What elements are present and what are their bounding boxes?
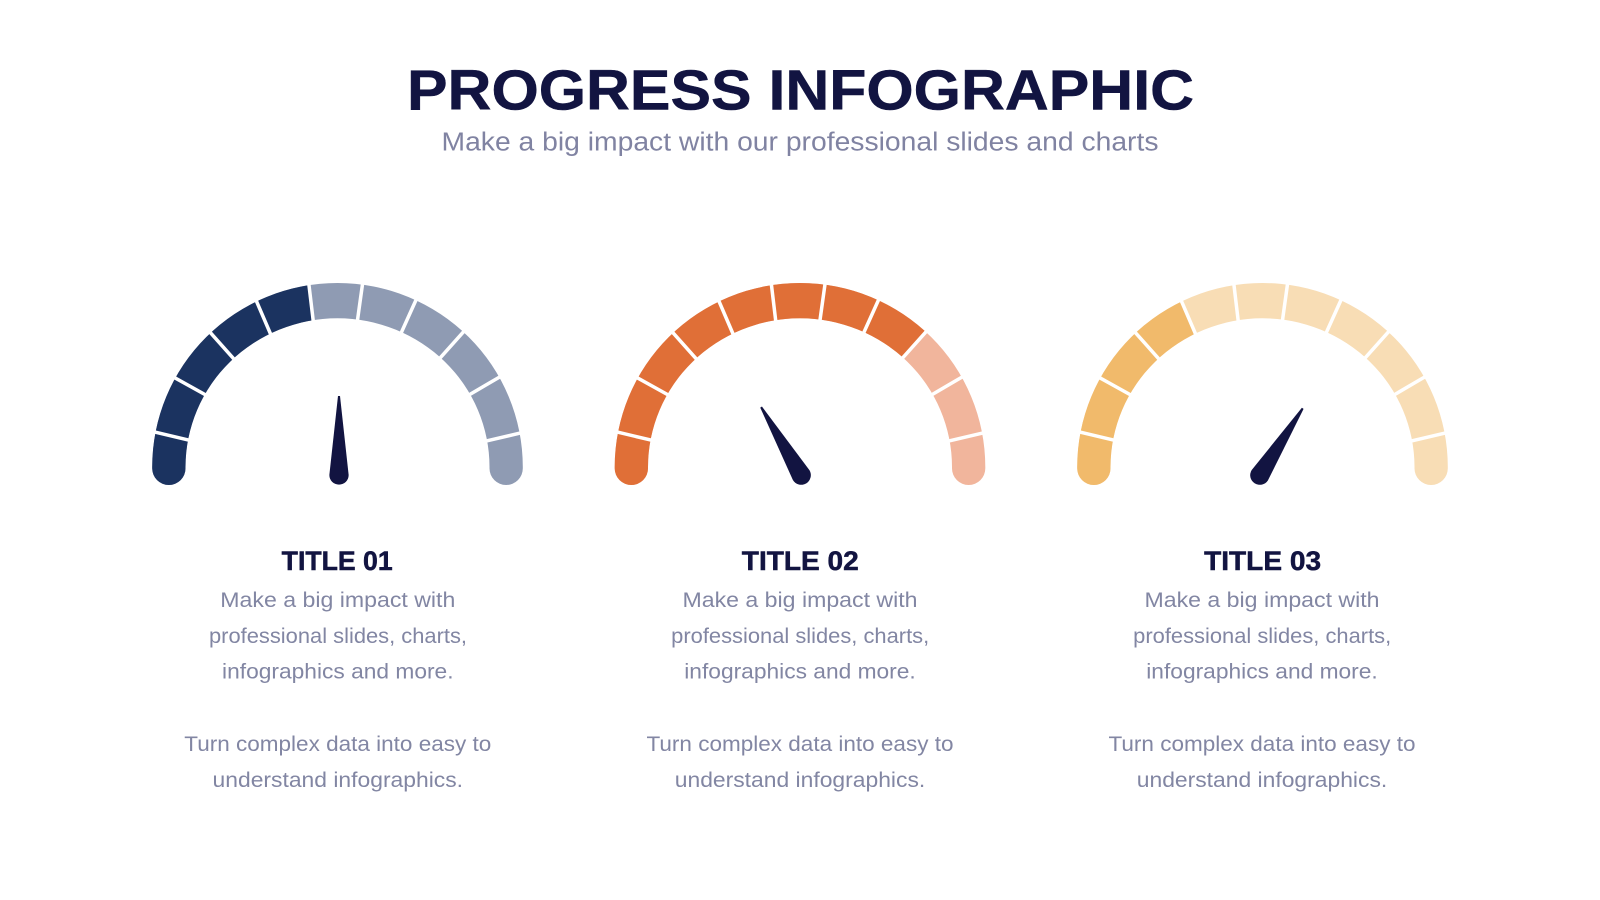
needle: [753, 402, 814, 488]
description: understand infographics.: [675, 769, 925, 792]
description: [184, 589, 491, 792]
gauge 03: [1077, 282, 1448, 488]
panel: title 02: [615, 282, 985, 792]
description: professional slides, charts,: [671, 625, 929, 648]
description: professional slides, charts,: [1133, 625, 1391, 648]
description: Turn complex data into easy to: [184, 733, 491, 756]
description: Turn complex data into easy to: [1108, 733, 1416, 756]
gauge 01: [152, 282, 523, 485]
description: professional slides, charts,: [209, 625, 467, 648]
description: Make a big impact with: [1144, 589, 1380, 612]
description: understand infographics.: [213, 769, 463, 792]
description: Turn complex data into easy to: [646, 733, 954, 756]
gauge track: [1077, 283, 1448, 485]
description: Make a big impact with: [682, 589, 918, 612]
description: infographics and more.: [222, 660, 454, 684]
heading: TITLE 01: [282, 546, 393, 576]
description: [646, 589, 954, 792]
needle: [1247, 403, 1311, 488]
gauge progress: [152, 285, 312, 485]
subtitle: Make a big impact with our professional slides and charts: [442, 129, 1158, 157]
description: understand infographics.: [1137, 769, 1387, 792]
gauge track: [615, 283, 985, 485]
description: infographics and more.: [1146, 660, 1378, 684]
gauge progress: [614, 283, 924, 485]
description: [1108, 589, 1416, 792]
gauge progress: [1077, 302, 1194, 485]
description: Make a big impact with: [220, 589, 455, 612]
panel: title 03: [1077, 282, 1448, 792]
title: PROGRESS INFOGRAPHIC: [407, 58, 1194, 122]
needle: [329, 396, 349, 485]
description: infographics and more.: [684, 660, 916, 684]
gauge 02: [615, 282, 985, 488]
panel: title 01: [152, 282, 523, 792]
heading: TITLE 03: [1204, 546, 1321, 576]
gauge track: [152, 283, 523, 485]
heading: TITLE 02: [742, 546, 859, 576]
